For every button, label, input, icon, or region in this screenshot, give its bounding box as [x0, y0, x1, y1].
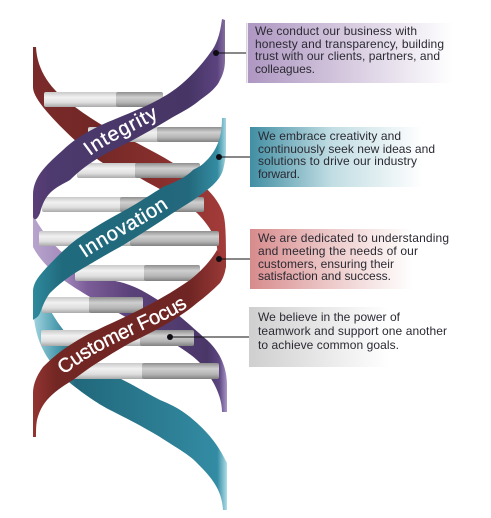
panel: teamwork: [249, 307, 449, 367]
panel: customer focus: We are dedicated to understanding: [258, 231, 449, 245]
connector: Innovation: [216, 154, 250, 160]
panel: teamwork: to achieve common goals.: [258, 338, 399, 352]
connector: Customer Focus: [216, 256, 250, 262]
helix rungs: [39, 92, 223, 379]
panel: innovation: [250, 127, 453, 187]
panel: teamwork: We believe in the power of: [258, 310, 401, 324]
panel: teamwork: teamwork and support one another: [258, 324, 447, 338]
ribbon: Customer Focus: [33, 250, 226, 437]
panel: customer focus: and meeting the needs of our: [258, 244, 418, 258]
panel: innovation: We embrace creativity and: [258, 129, 401, 143]
panel: customer focus: customers, ensuring their: [258, 257, 394, 271]
panel: integrity: We conduct our business with: [255, 24, 417, 38]
connector: Integrity: [213, 50, 247, 56]
label: Integrity: Integrity: [83, 108, 156, 156]
panel: integrity: colleagues.: [255, 62, 315, 76]
panel: innovation: continuously seek new ideas and: [258, 142, 435, 156]
label: Customer Focus: Customer Focus: [58, 299, 186, 372]
ribbon: Integrity: [33, 19, 225, 220]
back strand: purple lower: [33, 215, 227, 412]
panel: customer focus: [250, 229, 453, 289]
label: Innovation: Innovation: [78, 200, 168, 258]
panel: customer focus: satisfaction and success.: [258, 269, 391, 283]
connector: Teamwork: [167, 334, 249, 340]
panel: integrity: trust with our clients, partners, and: [255, 49, 440, 63]
back strand: teal lower: [33, 300, 227, 510]
panel: integrity: [246, 23, 453, 83]
panel: integrity: honesty and transparency, building: [255, 37, 444, 51]
panel: innovation: forward.: [258, 167, 300, 181]
panel: innovation: solutions to drive our industry: [258, 154, 417, 168]
back strand: red upper: [33, 47, 226, 268]
ribbon: Innovation: [33, 118, 226, 320]
